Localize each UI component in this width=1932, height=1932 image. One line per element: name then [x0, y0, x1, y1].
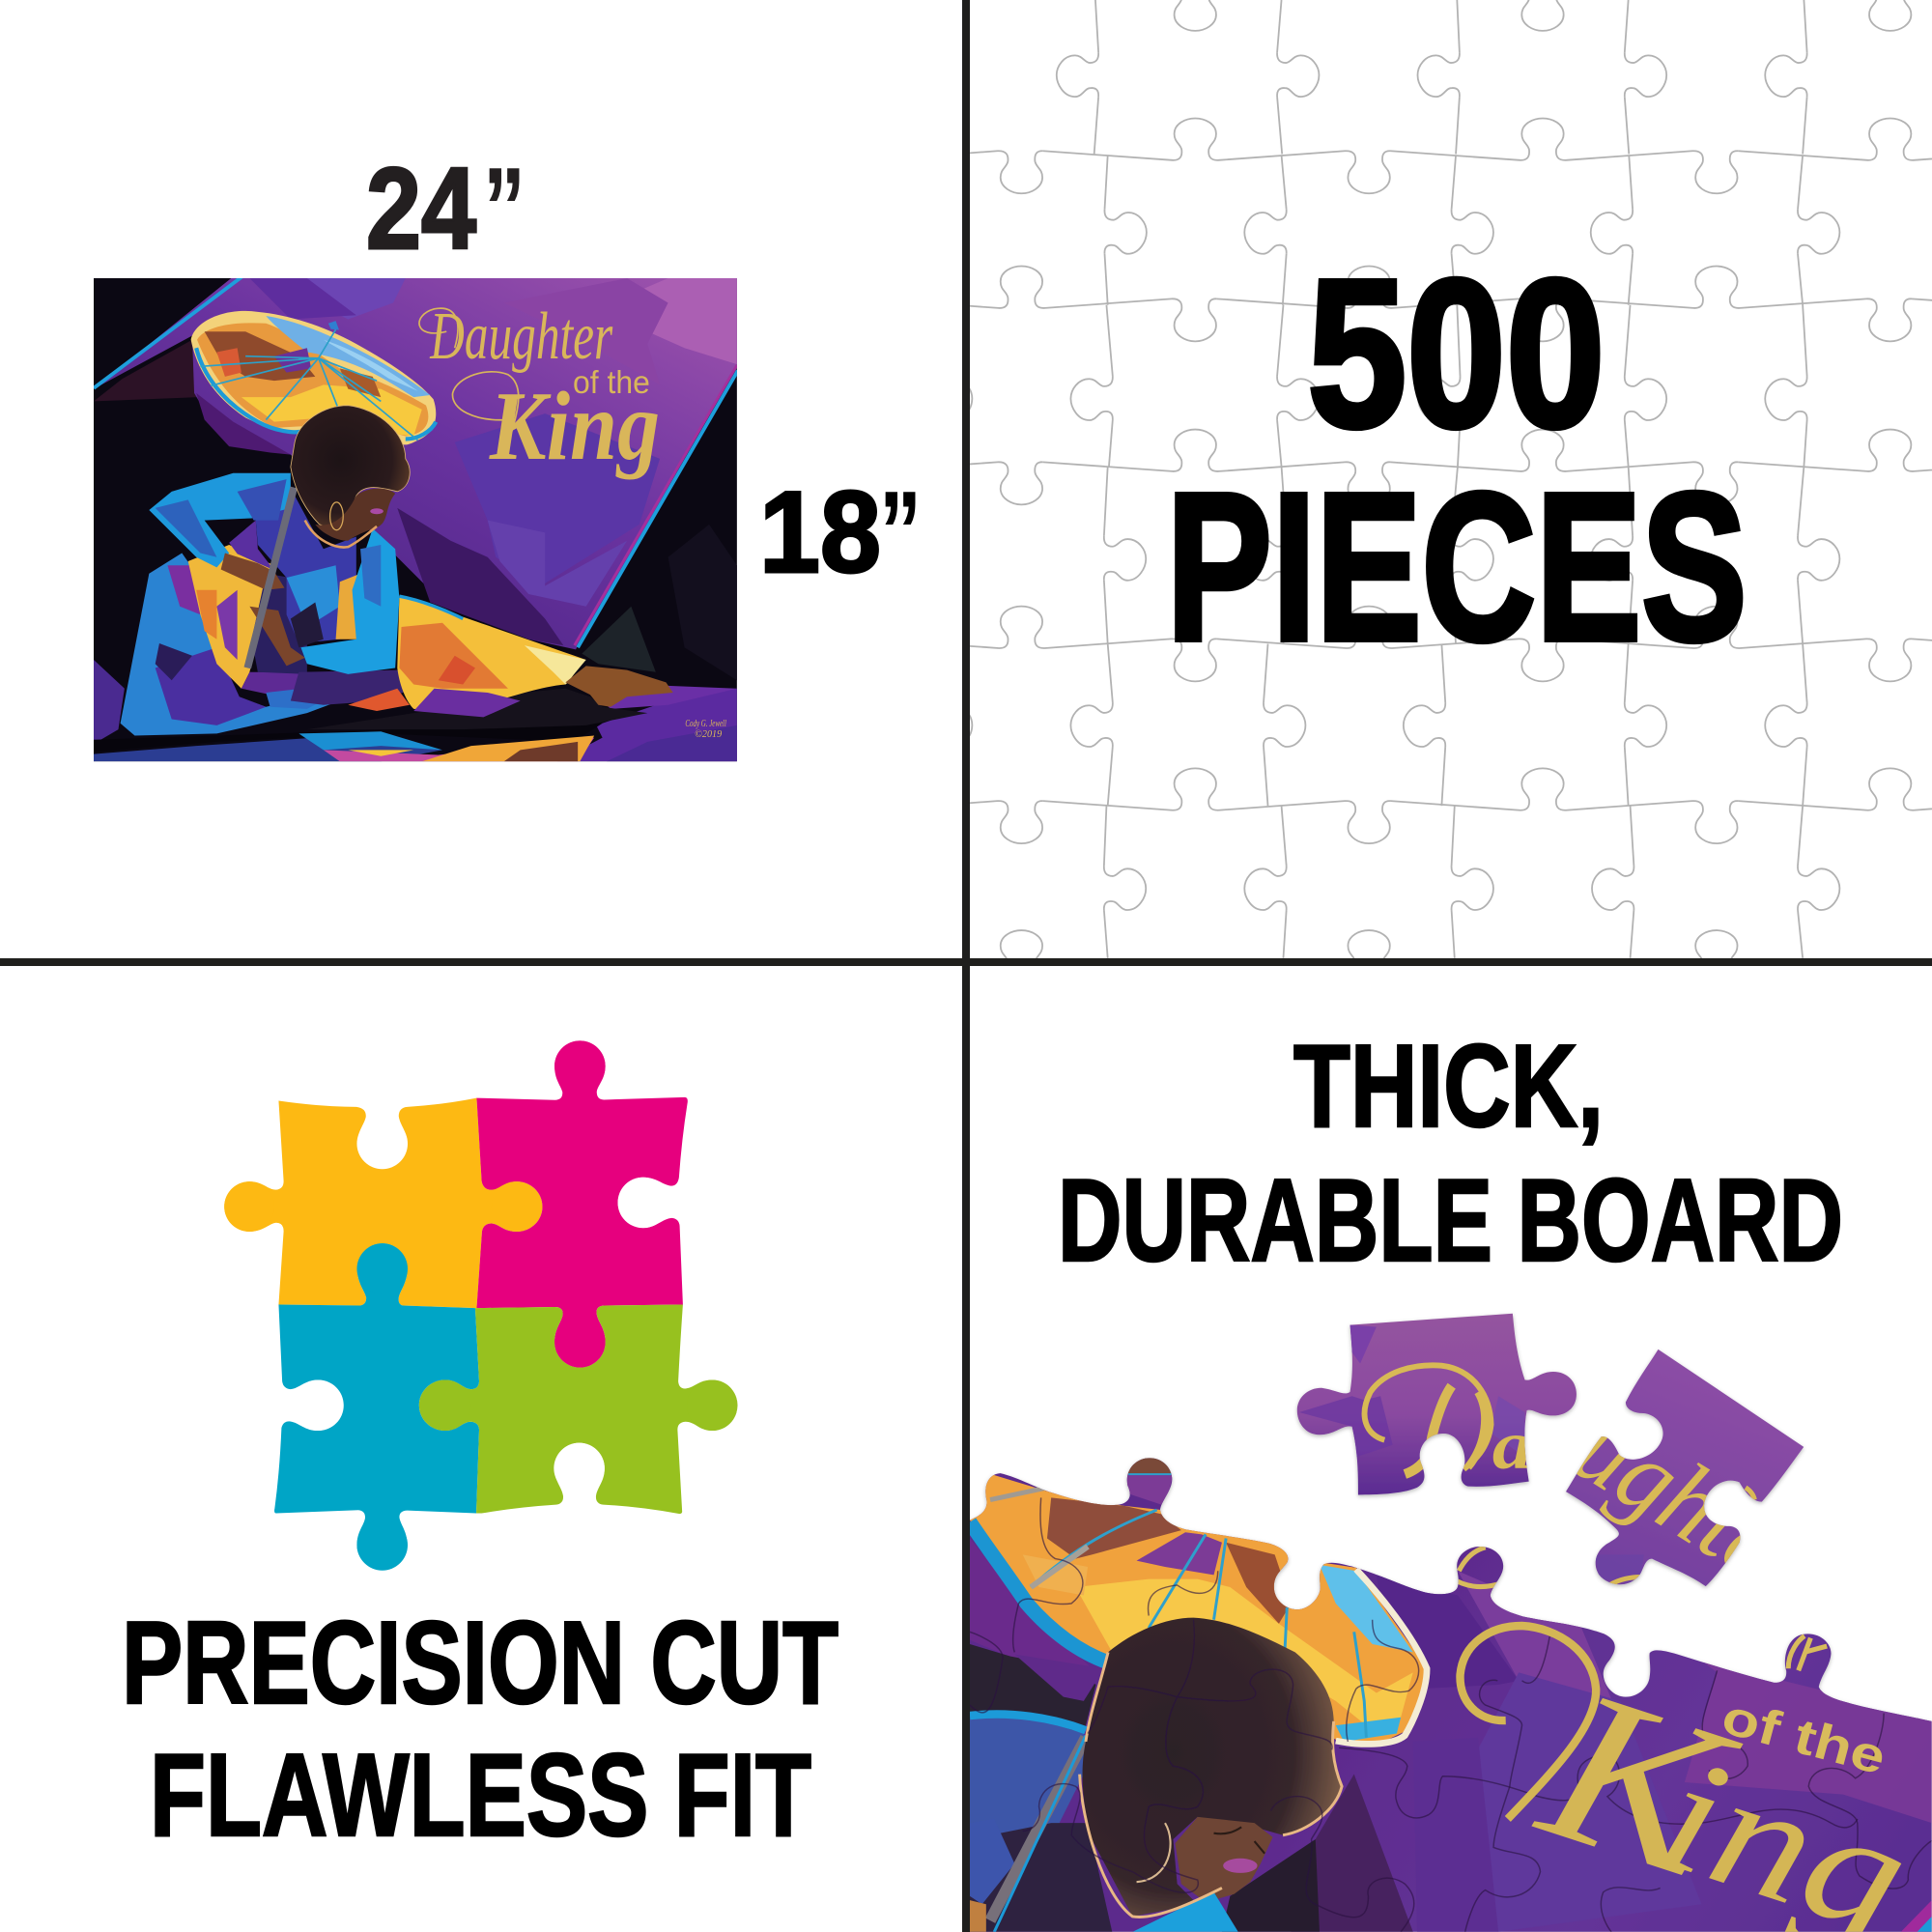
icon: four coloured puzzle pieces — [224, 1040, 738, 1571]
right side cut lines — [1339, 1632, 1932, 1932]
label: width 24 inches: 24 — [366, 144, 476, 273]
floor right — [557, 689, 737, 761]
magenta piece — [476, 1040, 688, 1368]
green piece — [419, 1304, 737, 1514]
blue collar — [1132, 1892, 1238, 1932]
label: width 24 inches: ” — [483, 144, 526, 273]
figure: hands — [221, 554, 305, 666]
figure: face — [305, 489, 395, 547]
King title fragment — [1531, 1698, 1901, 1932]
floor left — [94, 660, 125, 744]
yellow piece — [224, 1098, 542, 1308]
panel: jigsaw cut pattern background — [970, 0, 1932, 958]
earring — [1137, 1823, 1171, 1882]
artwork: Daughter of the King puzzle image — [94, 276, 738, 761]
heading: 500 pieces — [1167, 237, 1747, 685]
King title fragment: K — [1517, 1640, 1760, 1926]
heading: precision cut flawless fit: PRECISION CUT — [122, 1597, 838, 1728]
artist signature: ©2019 — [695, 729, 722, 740]
umbrella — [191, 311, 436, 444]
loose puzzle piece: Da: a — [1492, 1407, 1533, 1484]
figure: leg and foot — [565, 666, 673, 707]
title flourish — [418, 307, 520, 433]
heading: thick durable board — [1058, 1020, 1843, 1286]
dark corner beside neck — [1222, 1839, 1320, 1932]
loose puzzle piece: ughte: ughte — [1555, 1387, 1804, 1604]
arm and dark left section — [970, 1644, 1112, 1932]
cyan piece — [274, 1243, 479, 1570]
artwork title text: of the — [573, 365, 650, 401]
artwork title text — [430, 299, 660, 481]
label: height 18 inches: ” — [879, 468, 922, 597]
label: height 18 inches: 18 — [759, 468, 881, 597]
afro hair — [1083, 1618, 1342, 1917]
umbrella section — [970, 1457, 1427, 1745]
artwork title text: Daughter — [430, 299, 613, 374]
heading: thick durable board: THICK, — [1293, 1020, 1604, 1151]
face and neck — [1176, 1817, 1273, 1902]
umbrella pole — [247, 488, 294, 668]
figure: hair — [291, 406, 410, 526]
heading: 500 pieces: 500 — [1308, 237, 1605, 471]
photo: assembled puzzle close-up — [970, 1294, 1932, 1932]
artist signature: Cody G. Jewell — [685, 719, 726, 729]
backdrop patches — [196, 278, 737, 645]
dark maroon shadow beside umbrella — [94, 340, 198, 401]
figure: torso and arms — [149, 473, 399, 674]
purple diamond backdrop — [94, 278, 737, 649]
stripes — [94, 276, 738, 647]
K flourish — [1461, 1626, 1596, 1819]
bottom reflections — [94, 724, 603, 761]
backdrop shards — [970, 1539, 1932, 1932]
puzzle cut lines — [970, 1497, 1419, 1932]
figure: under-arm shadow — [291, 670, 413, 705]
dark lower right shard — [582, 607, 656, 672]
of the title fragment: of the — [1717, 1689, 1891, 1785]
artist signature — [686, 720, 726, 737]
figure: left skirt — [120, 520, 330, 736]
heading: precision cut flawless fit — [122, 1597, 838, 1861]
figure: right skirt — [348, 596, 586, 717]
loose puzzle piece: Da — [1297, 1314, 1577, 1494]
heading: precision cut flawless fit: FLAWLESS FIT — [150, 1729, 811, 1861]
round tab bulbs and notches — [224, 1040, 738, 1571]
artwork title text: King — [489, 372, 660, 481]
hair edge — [1080, 1652, 1342, 1917]
gold tab fragments — [1457, 1548, 1827, 1670]
shadow beneath skirt — [307, 689, 647, 729]
heading: 500 pieces: PIECES — [1167, 450, 1747, 685]
